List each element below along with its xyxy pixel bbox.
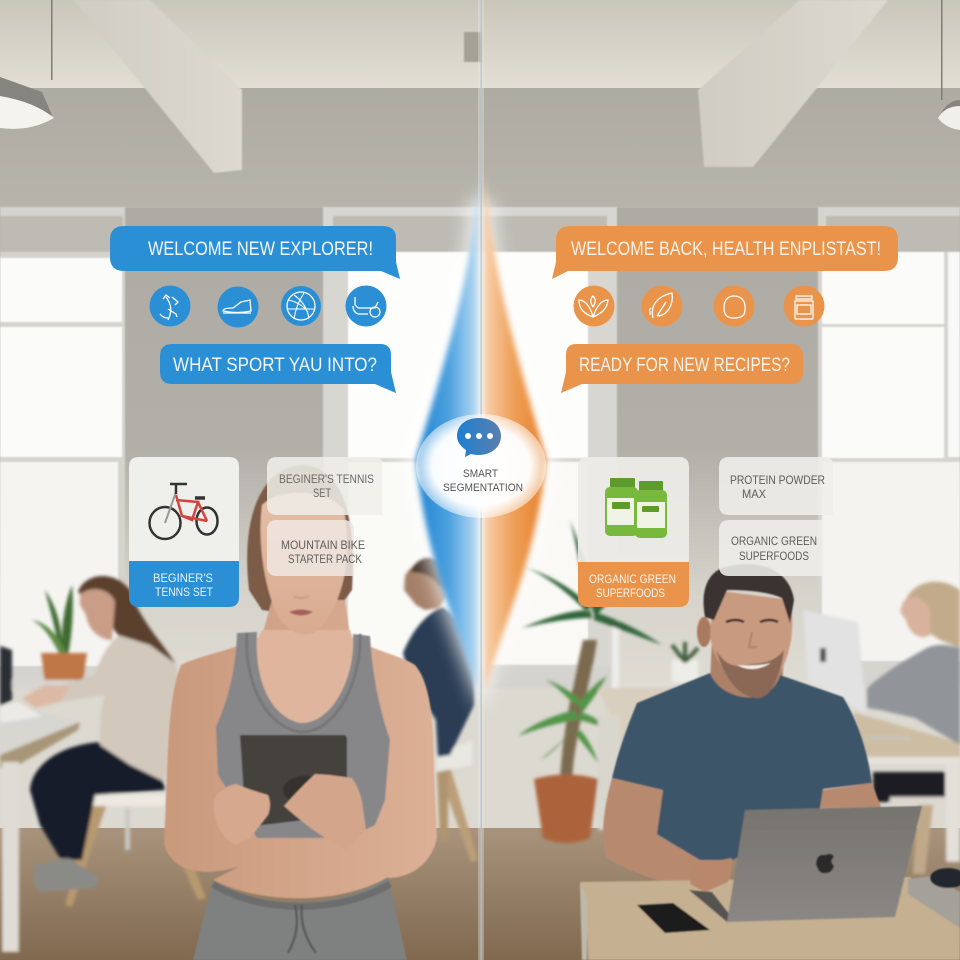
product card: supplements: ORGANIC GREEN: [589, 572, 676, 586]
speech bubble: sport: WHAT SPORT YAU INTO?: [173, 355, 377, 376]
left panel: new explorer: [110, 226, 400, 607]
big plant: [484, 520, 700, 843]
wave haze: [405, 200, 557, 710]
product card: bike: [129, 457, 239, 607]
label: SMART: [463, 468, 498, 480]
glass option: protein: MAX: [742, 487, 766, 501]
background people and furniture: [0, 520, 960, 952]
glass option: superfoods: [719, 520, 823, 576]
hands: [214, 784, 270, 845]
glass option: tennis: BEGINER'S TENNIS: [279, 472, 374, 486]
chest: [226, 630, 372, 800]
plant: [45, 585, 73, 655]
hands: [22, 685, 70, 708]
glass option: protein: PROTEIN POWDER: [730, 473, 825, 487]
glass option: bike: STARTER PACK: [288, 552, 362, 566]
icon: runner: [150, 286, 190, 326]
speech bubble: welcome: [110, 226, 400, 279]
icon: powder scoop: [714, 286, 754, 326]
beard: [716, 650, 784, 698]
icon: bicycle: [150, 484, 218, 539]
smart segmentation badge: [416, 414, 546, 518]
blue wave: [416, 170, 478, 695]
blonde woman: [903, 582, 960, 648]
gray tank top: [216, 632, 390, 838]
glass option: bike: MOUNTAIN BIKE: [281, 538, 365, 552]
product card: bike: TENNS SET: [155, 585, 214, 599]
right panel: health enthusiast: [552, 226, 898, 607]
speech bubble: sport: [160, 344, 396, 393]
glass option: protein: [719, 457, 833, 515]
hair: [247, 465, 353, 620]
hair: [704, 564, 794, 623]
icon: supplement jar: [784, 286, 824, 326]
glass option: tennis: SET: [313, 486, 332, 500]
product card: supplements: [578, 457, 689, 607]
far desk: [803, 582, 960, 874]
nose and mouth: [289, 610, 313, 616]
windows: [0, 207, 960, 687]
glass option: superfoods: ORGANIC GREEN: [731, 534, 817, 548]
t-shirt: [612, 673, 872, 860]
sweater: [45, 634, 177, 782]
desk: [0, 708, 80, 762]
icon: basketball: [281, 286, 321, 326]
chair: [73, 794, 165, 806]
ceiling beams: [73, 0, 888, 173]
phone: [637, 903, 710, 933]
face: [80, 589, 115, 640]
neck: [710, 640, 785, 699]
icon: chat bubble: [457, 418, 501, 457]
monitor: [803, 610, 866, 714]
blue shirt man: [403, 558, 478, 862]
shorts: [193, 877, 407, 960]
face: [261, 493, 347, 635]
ear: [697, 617, 711, 647]
left desk and seated woman: [0, 576, 206, 952]
icon: leaf: [642, 286, 682, 326]
hand: [690, 858, 732, 892]
speech bubble: welcome back: [552, 226, 898, 279]
plant frame: [484, 666, 614, 688]
legs: [30, 742, 165, 860]
laptop lid: [727, 806, 922, 922]
orange wave: [484, 170, 546, 695]
product card: bike: BEGINER'S: [153, 571, 213, 585]
speech bubble: recipes: [561, 344, 803, 393]
pendant lamps: [0, 0, 960, 130]
hair: [78, 576, 176, 664]
glass option: tennis: [267, 457, 382, 515]
glass option: bike: [267, 520, 365, 576]
speech bubble: recipes: READY FOR NEW RECIPES?: [579, 355, 790, 376]
icon: sprout: [574, 286, 614, 326]
laptop base: [689, 890, 730, 922]
centre divider: [405, 0, 557, 960]
icon: gear: [346, 286, 386, 326]
tablet: [240, 735, 347, 827]
icon: shoe: [218, 286, 258, 328]
apple logo: [816, 854, 834, 873]
small shelf plant: [672, 660, 698, 682]
notebook: [908, 876, 960, 928]
label: SEGMENTATION: [443, 482, 523, 494]
man with laptop: [580, 564, 960, 960]
face: [710, 590, 792, 698]
man's desk behind: [598, 688, 700, 760]
desk: [580, 877, 960, 960]
woman with tablet: [164, 465, 437, 960]
speech bubble: welcome back: WELCOME BACK, HEALTH ENPLISTAST!: [571, 239, 881, 260]
arms: [603, 778, 733, 888]
icon: green bottles: [605, 478, 667, 538]
mouse: [930, 868, 960, 888]
product card: supplements: SUPERFOODS: [596, 586, 665, 600]
body skin: [164, 600, 437, 898]
glass option: superfoods: SUPERFOODS: [739, 549, 809, 563]
glow: [416, 414, 546, 518]
speech bubble: welcome: WELCOME NEW EXPLORER!: [148, 239, 373, 260]
